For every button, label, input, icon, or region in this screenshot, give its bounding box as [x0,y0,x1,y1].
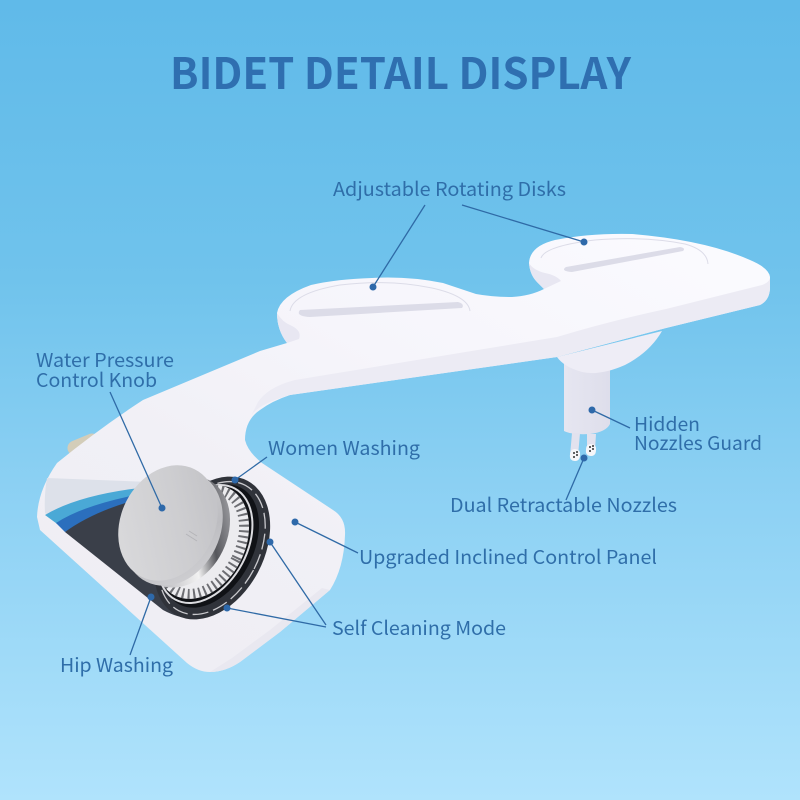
nozzles [569,433,597,461]
control box front edge [210,588,330,672]
label: adjustable rotating disks: Adjustable Rotating Disks [333,175,566,202]
label: hidden nozzles guard [634,410,762,456]
label: upgraded inclined control panel: Upgraded Inclined Control Panel [359,543,657,570]
control panel window [45,478,200,618]
label: hidden nozzles guard: Hidden [634,410,700,437]
label: self cleaning mode: Self Cleaning Mode [332,614,506,641]
disk: right [541,239,708,272]
label: dual retractable nozzles: Dual Retractable Nozzles [450,491,677,518]
left disk edge shading [277,313,300,343]
title: BIDET DETAIL DISPLAY [170,40,632,102]
leader: nozzles guard [592,410,630,428]
nozzle guard [564,350,610,461]
chrome band [118,461,248,603]
leader: women washing [235,457,267,480]
knurled collar [136,469,268,615]
leader lines [110,205,630,655]
leader: hip washing [130,597,151,655]
label: hip washing: Hip Washing [60,651,173,678]
plate front edge shading [250,277,770,418]
label: water pressure control knob: Control Knob [36,366,157,393]
leader: dual nozzles [566,458,584,500]
leader: self cleaning [227,542,326,627]
disk: left [290,283,470,317]
nozzle housing dome [557,331,662,373]
knob face [99,448,237,598]
knob [99,448,268,615]
label: hidden nozzles guard: Nozzles Guard [634,429,762,456]
leader: rotating disks [373,205,584,287]
label: water pressure control knob: Water Pressure [36,346,174,373]
icon: rear water inlet stub [75,441,92,448]
label: water pressure control knob [36,346,174,393]
label: women washing: Women Washing [268,434,420,461]
leader: water pressure knob [110,392,162,508]
cap side [104,453,242,603]
right disk edge shading [529,263,561,289]
leader: control panel [295,522,358,553]
bidet body [37,234,770,672]
leader dots [148,238,596,612]
dial ring [130,456,294,640]
